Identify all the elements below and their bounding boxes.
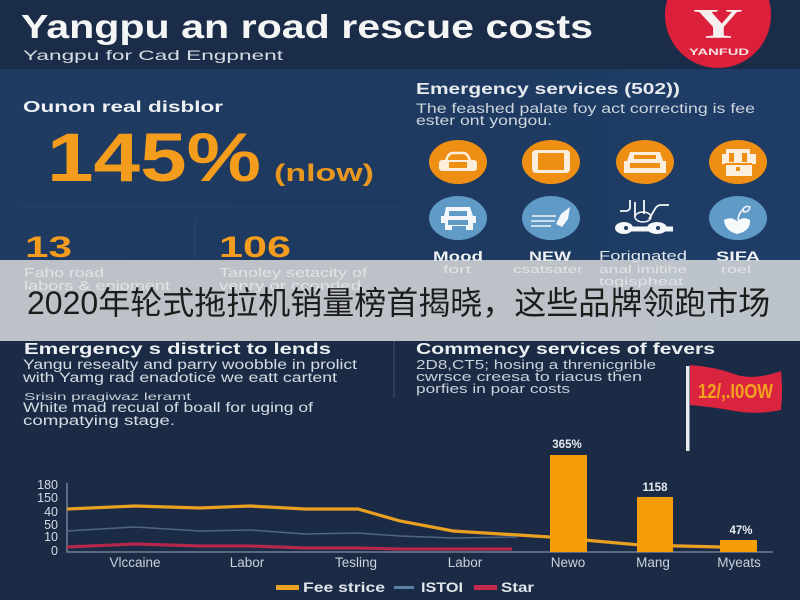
x axis labels: Labor bbox=[448, 555, 483, 570]
logo letter Y: Y bbox=[693, 2, 743, 48]
stat heading: Ounon real disblor bbox=[23, 99, 223, 116]
x axis labels: Myeats bbox=[717, 555, 761, 570]
panel: emergency services bbox=[416, 81, 767, 288]
bar values bbox=[552, 439, 753, 537]
stat: 13 bbox=[24, 231, 171, 293]
bar: Mang bbox=[637, 497, 673, 552]
trends note: Srisin pragiwaz leramt bbox=[24, 391, 191, 403]
line: ISTOI bbox=[67, 527, 517, 538]
logo badge bbox=[665, 0, 771, 68]
icon labels: NEW bbox=[529, 249, 571, 264]
stat: 106: venry or cconded bbox=[219, 278, 361, 293]
x axis labels: Vlccaine bbox=[109, 555, 161, 570]
icon labels: roel bbox=[721, 264, 751, 276]
flag callout: 12/,.I0OW bbox=[698, 381, 773, 403]
x axis labels: Mang bbox=[636, 555, 670, 570]
services heading: Emergency services (502)) bbox=[416, 81, 680, 98]
y axis labels: 0 bbox=[51, 544, 58, 558]
y axis labels: 10 bbox=[44, 530, 58, 544]
flag callout bbox=[686, 365, 782, 451]
icon: truck front bbox=[616, 140, 674, 184]
trends heading: Emergency s district to lends bbox=[24, 341, 331, 358]
icon: fruit bbox=[709, 196, 767, 240]
icon labels: csatsater bbox=[513, 264, 584, 276]
commency heading: Commency services of fevers bbox=[416, 341, 715, 358]
bar values: 1158 bbox=[643, 482, 668, 494]
stat 13 caption: Faho road bbox=[24, 265, 104, 280]
line: fee strice bbox=[67, 506, 720, 547]
bar: Myeats bbox=[720, 540, 757, 552]
icon: car outline bbox=[429, 196, 487, 240]
caption text: 2020年轮式拖拉机销量榜首揭晓，这些品牌领跑市场 bbox=[27, 285, 770, 321]
x axis labels: Newo bbox=[551, 555, 585, 570]
bar values: 47% bbox=[729, 525, 753, 537]
icon labels: SIFA bbox=[716, 249, 760, 264]
panel: district trends text: White mad recual of boall for uging of bbox=[23, 400, 313, 415]
panel: commency services text: cwrsce creesa to riacus then bbox=[416, 370, 642, 384]
panel: district trends text bbox=[22, 341, 357, 428]
stat qualifier: (nlow) bbox=[274, 160, 374, 187]
legend: Fee strice bbox=[303, 580, 386, 595]
stat: 13: 13 bbox=[25, 231, 72, 264]
overlay caption band bbox=[0, 260, 800, 341]
legend: Star bbox=[501, 580, 535, 595]
stat 106 caption: Tanoley setacity of bbox=[219, 265, 368, 280]
y axis labels: 180 bbox=[37, 478, 58, 492]
y axis labels bbox=[37, 478, 58, 558]
logo wordmark: YANFUD bbox=[689, 47, 749, 58]
big stat: 145% bbox=[47, 119, 261, 196]
background: middle panel bbox=[0, 69, 800, 341]
panel: district trends text: with Yamg rad enadotice we eatt cartent bbox=[22, 370, 337, 385]
icon labels: fort bbox=[443, 264, 471, 276]
panel: emergency services: ester ont yongou. bbox=[416, 113, 552, 128]
panel: commency services text: porfies in poar costs bbox=[416, 382, 570, 396]
icon labels: togispheat bbox=[599, 276, 683, 288]
x axis labels: Tesling bbox=[335, 555, 377, 570]
y axis labels: 50 bbox=[44, 518, 58, 532]
icon: tow car bbox=[429, 140, 487, 184]
icon labels: anal imitihe bbox=[599, 264, 687, 276]
icon: service kit bbox=[709, 140, 767, 184]
icon labels bbox=[433, 248, 760, 288]
bar: Newo bbox=[550, 455, 587, 552]
chart: trends and bars bbox=[37, 439, 773, 595]
panel: headline stat bbox=[23, 99, 374, 196]
icon labels: Forignated bbox=[599, 248, 687, 263]
header band bbox=[0, 0, 800, 69]
line: star bbox=[67, 544, 512, 549]
bar values: 365% bbox=[552, 439, 582, 451]
stat: 13: labors & enjoment bbox=[24, 278, 171, 293]
icon: mechanical linkage bbox=[615, 200, 673, 234]
stat: 106 bbox=[219, 231, 368, 293]
icon labels: Mood bbox=[433, 249, 483, 264]
title: Yangpu an road rescue costs bbox=[21, 8, 593, 45]
panel: commency services text bbox=[416, 341, 715, 396]
subtitle: Yangpu for Cad Engpnent bbox=[23, 47, 283, 63]
legend: ISTOI bbox=[421, 580, 463, 595]
commency paragraph: 2D8,CT5; hosing a threnicgrible bbox=[416, 358, 656, 372]
panel: district trends text: compatying stage. bbox=[23, 413, 175, 428]
lower panel background bbox=[0, 341, 800, 600]
axes bbox=[67, 483, 773, 552]
y axis labels: 150 bbox=[37, 491, 58, 505]
stat: 106: 106 bbox=[219, 231, 291, 264]
icon: bus front bbox=[522, 140, 580, 184]
y axis labels: 40 bbox=[44, 505, 58, 519]
legend bbox=[276, 580, 535, 595]
icon: speed hand bbox=[522, 196, 580, 240]
x axis labels: Labor bbox=[230, 555, 265, 570]
services description: The feashed palate foy act correcting is fee bbox=[416, 101, 755, 116]
x axis labels bbox=[109, 555, 761, 570]
trends paragraph: Yangu resealty and parry woobble in prolict bbox=[23, 357, 357, 372]
